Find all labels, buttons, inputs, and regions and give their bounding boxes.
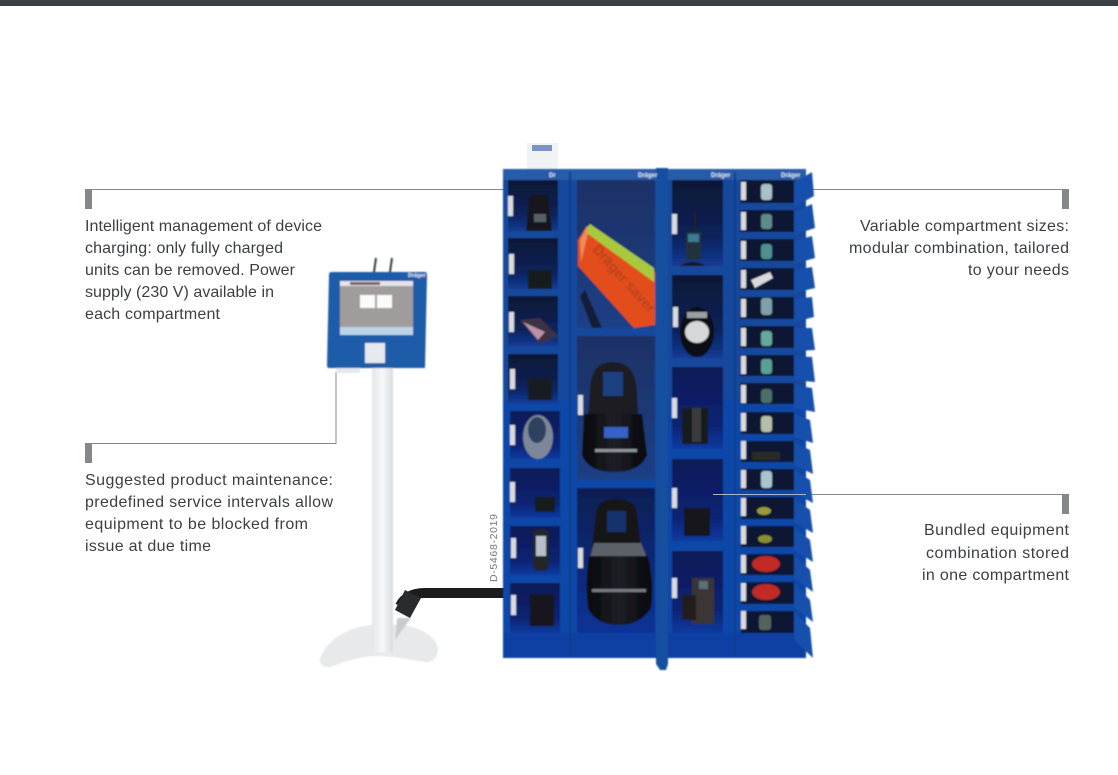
cabinet body [503, 169, 806, 658]
column separators [570, 172, 735, 656]
column 1 compartments [508, 180, 560, 633]
breathing tank lower [587, 499, 652, 625]
callout: product maintenance: predefined service intervals allow [85, 494, 333, 511]
bundled equipment pointer [713, 494, 806, 496]
breathing tank upper [582, 362, 647, 472]
terminal logo: Dräger [408, 273, 427, 279]
callout: compartment sizes [806, 189, 1069, 279]
callout: bundled equipment: combination stored [926, 545, 1069, 562]
image code: D-5468-2019 [488, 514, 500, 582]
top dark bar [0, 0, 1118, 6]
callout: device charging: units can be removed. Power [85, 262, 296, 279]
callout: device charging: Intelligent management of device [85, 218, 322, 235]
cabinet logos: Dr [549, 173, 556, 179]
callout: device charging: charging: only fully charged [85, 240, 283, 257]
cabinet logos: Dräger [638, 173, 658, 179]
column 4 devices [751, 184, 780, 630]
callout: product maintenance: equipment to be blocked from [85, 516, 308, 533]
callout: device charging: each compartment [85, 306, 221, 323]
charging sockets [508, 182, 746, 629]
power cable [395, 590, 504, 618]
terminal screen [340, 282, 413, 335]
callout: device charging [85, 189, 504, 323]
column 3 devices [680, 212, 714, 624]
stand base [320, 625, 438, 667]
callout: product maintenance: Suggested product maintenance: [85, 472, 333, 489]
card reader [365, 343, 385, 363]
callout: compartment sizes: modular combination, tailored [849, 240, 1069, 257]
callout: product maintenance: issue at due time [85, 538, 211, 555]
antennas [374, 258, 392, 272]
column 4 compartments [740, 180, 794, 633]
callout: compartment sizes: to your needs [968, 262, 1069, 279]
locker cabinet [503, 168, 815, 670]
column 2 compartments [577, 180, 655, 633]
callout: bundled equipment [806, 494, 1070, 584]
cabinet logos: Dräger [781, 173, 801, 179]
stand pole [372, 368, 393, 652]
printer card on top [527, 143, 558, 170]
callout: device charging: supply (230 V) available in [85, 284, 274, 301]
hose sleeve [395, 618, 411, 640]
callout: bundled equipment: Bundled equipment [924, 522, 1070, 539]
orange rescue bag: Dräger saver [590, 241, 659, 316]
callout: compartment sizes: Variable compartment sizes: [860, 218, 1069, 235]
orange rescue bag [578, 224, 659, 328]
column 1 devices [520, 195, 558, 626]
cabinet logos [549, 173, 801, 179]
central door [656, 168, 668, 670]
terminal stand [320, 258, 438, 667]
callout: product maintenance [85, 372, 336, 555]
column 3 compartments [672, 180, 723, 633]
callout: bundled equipment: in one compartment [922, 567, 1070, 584]
terminal housing [327, 272, 427, 368]
cabinet logos: Dräger [711, 173, 731, 179]
column 4 open doors [794, 172, 815, 658]
screen buttons [360, 295, 375, 308]
